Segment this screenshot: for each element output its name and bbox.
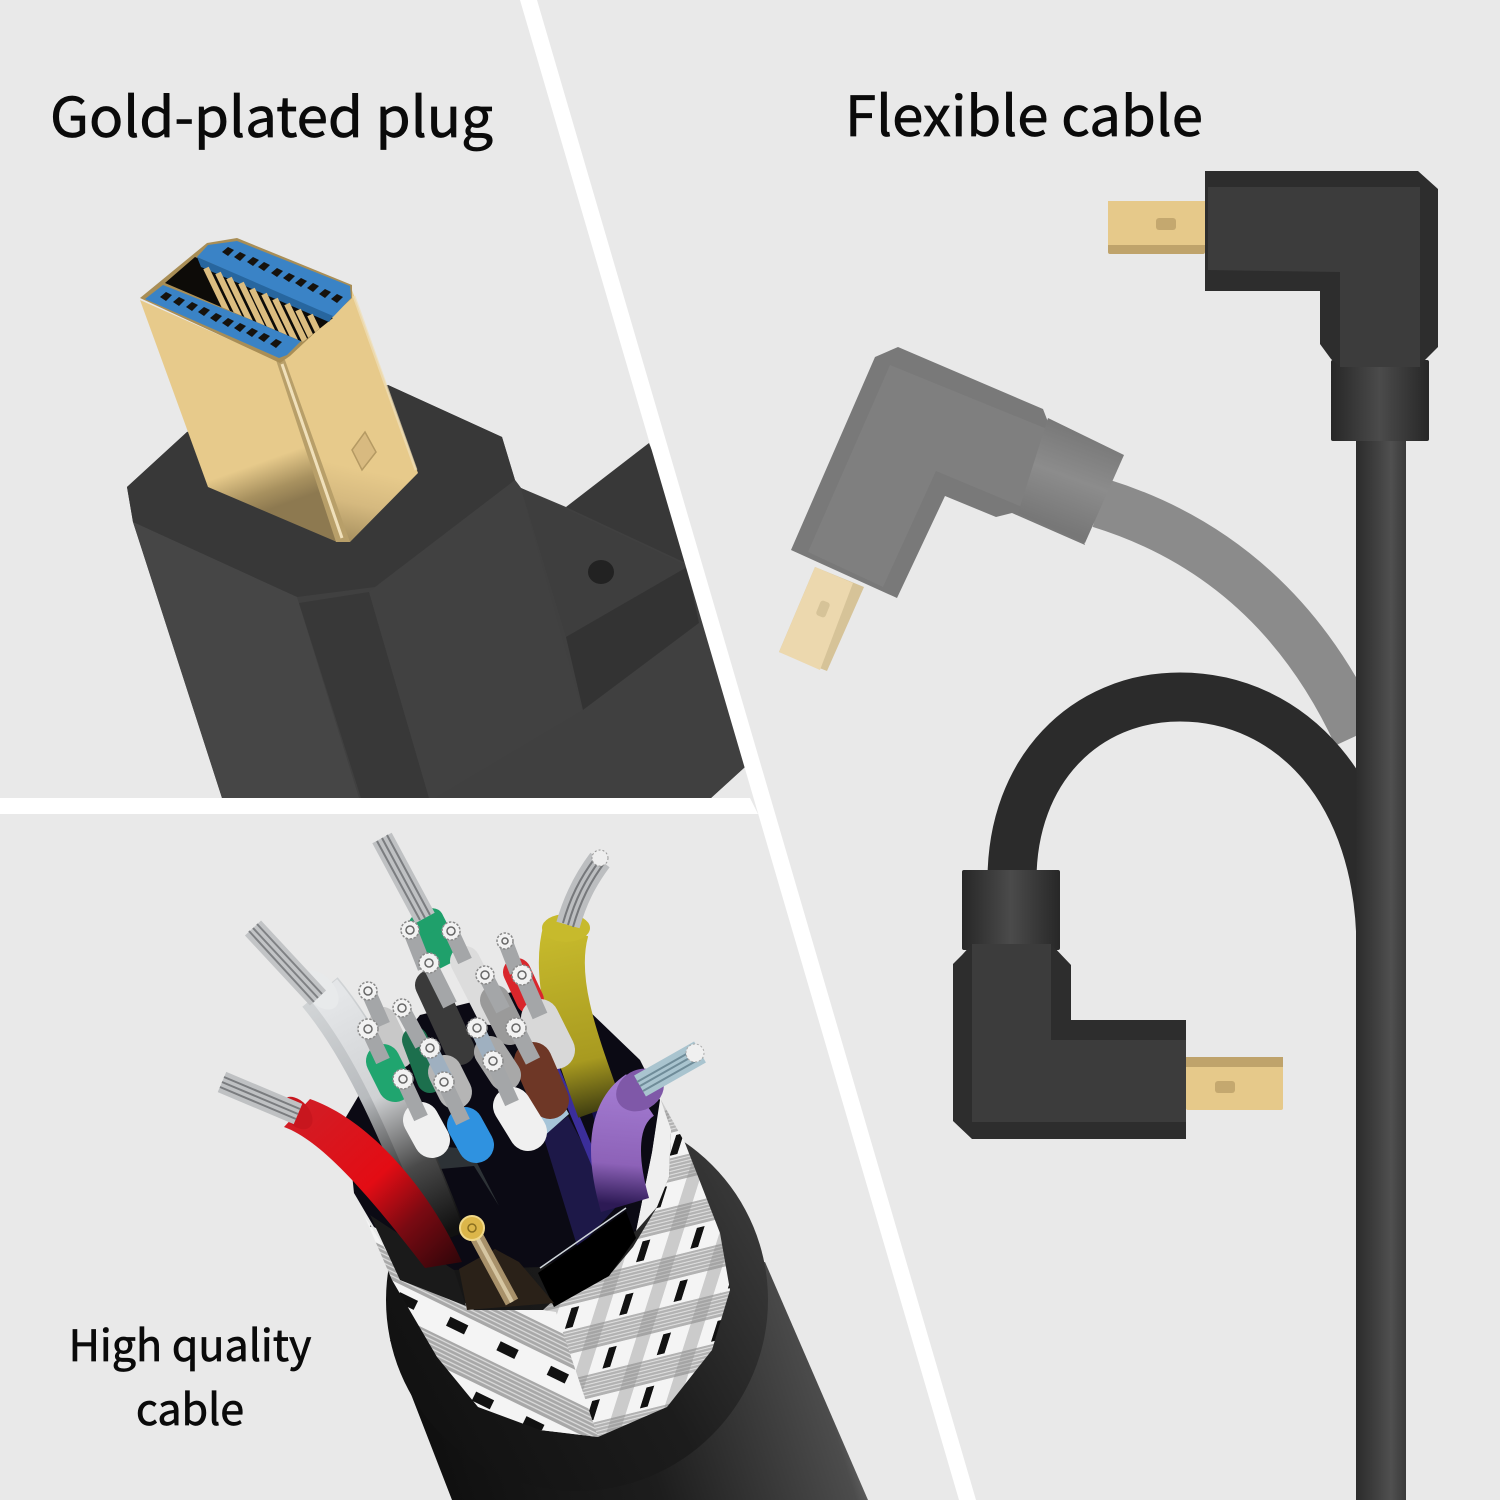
shield foil and inner strips xyxy=(370,1040,636,1310)
caption: high quality cable: High quality xyxy=(69,1312,311,1374)
red wire xyxy=(220,1077,462,1268)
caption: high quality cable: cable xyxy=(136,1376,244,1438)
grey ghost cable xyxy=(1100,503,1358,735)
black cable loop xyxy=(1012,697,1381,950)
black outer jacket xyxy=(386,1109,868,1500)
drain wire with gold tip xyxy=(460,1216,512,1302)
panel: high quality cable xyxy=(69,835,868,1500)
wire tips xyxy=(358,921,532,1092)
screw hole xyxy=(588,560,614,584)
panel: flexible cable xyxy=(779,72,1438,1500)
panel: gold-plated plug xyxy=(50,73,745,798)
bottom black connector xyxy=(953,870,1283,1139)
contact window diamond xyxy=(352,432,376,470)
braided shield xyxy=(364,1098,730,1437)
inner cavity xyxy=(346,990,660,1270)
heading: flexible cable: Flexible cable xyxy=(845,72,1203,152)
grey ghost connector xyxy=(779,347,1124,671)
black plug housing xyxy=(127,385,745,798)
gold connector tip xyxy=(140,238,418,542)
main vertical cable xyxy=(1356,440,1406,1500)
heading: gold-plated plug: Gold-plated plug xyxy=(50,73,493,153)
top black connector xyxy=(1108,171,1438,441)
contact pins xyxy=(203,266,320,342)
white dividers xyxy=(0,0,976,1500)
contact slots xyxy=(160,247,343,348)
purple wire xyxy=(608,1044,704,1205)
small core wires xyxy=(368,930,556,1145)
back wires xyxy=(249,835,608,1240)
